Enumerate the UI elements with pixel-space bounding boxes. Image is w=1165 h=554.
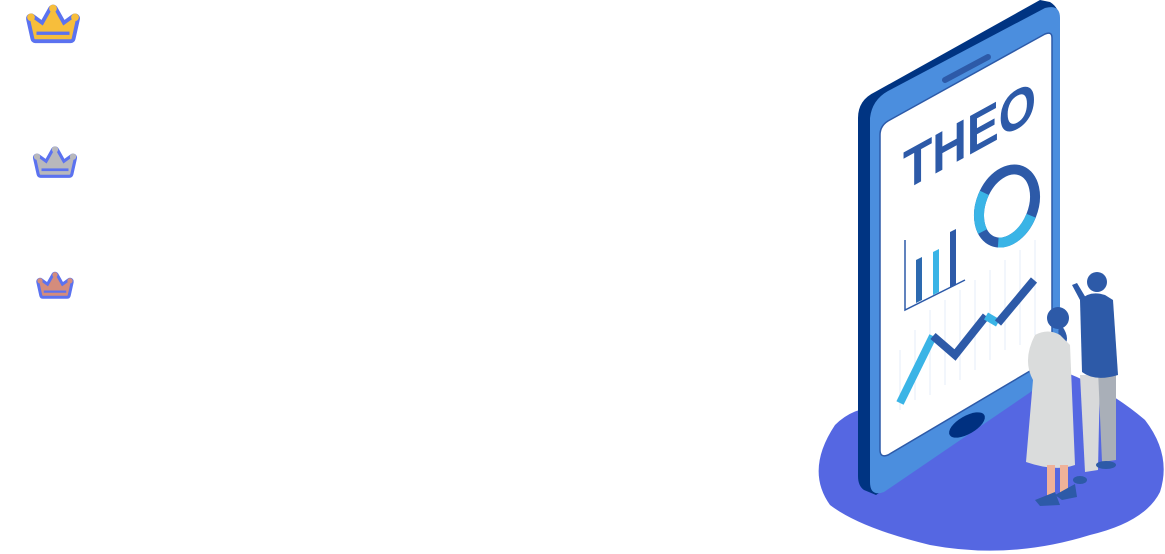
- blob background: [819, 372, 1164, 551]
- bar chart: [905, 229, 965, 310]
- man: [1072, 272, 1118, 484]
- donut chart: [969, 161, 1045, 251]
- text: THEO: THEO: [903, 68, 1036, 203]
- illustration: phone with people: [819, 0, 1164, 551]
- line chart: [900, 240, 1035, 410]
- phone: [858, 0, 1060, 495]
- icon: silver crown: [34, 146, 76, 174]
- icon: bronze crown: [37, 272, 73, 295]
- woman: [1026, 307, 1077, 506]
- icon: gold crown: [27, 5, 79, 38]
